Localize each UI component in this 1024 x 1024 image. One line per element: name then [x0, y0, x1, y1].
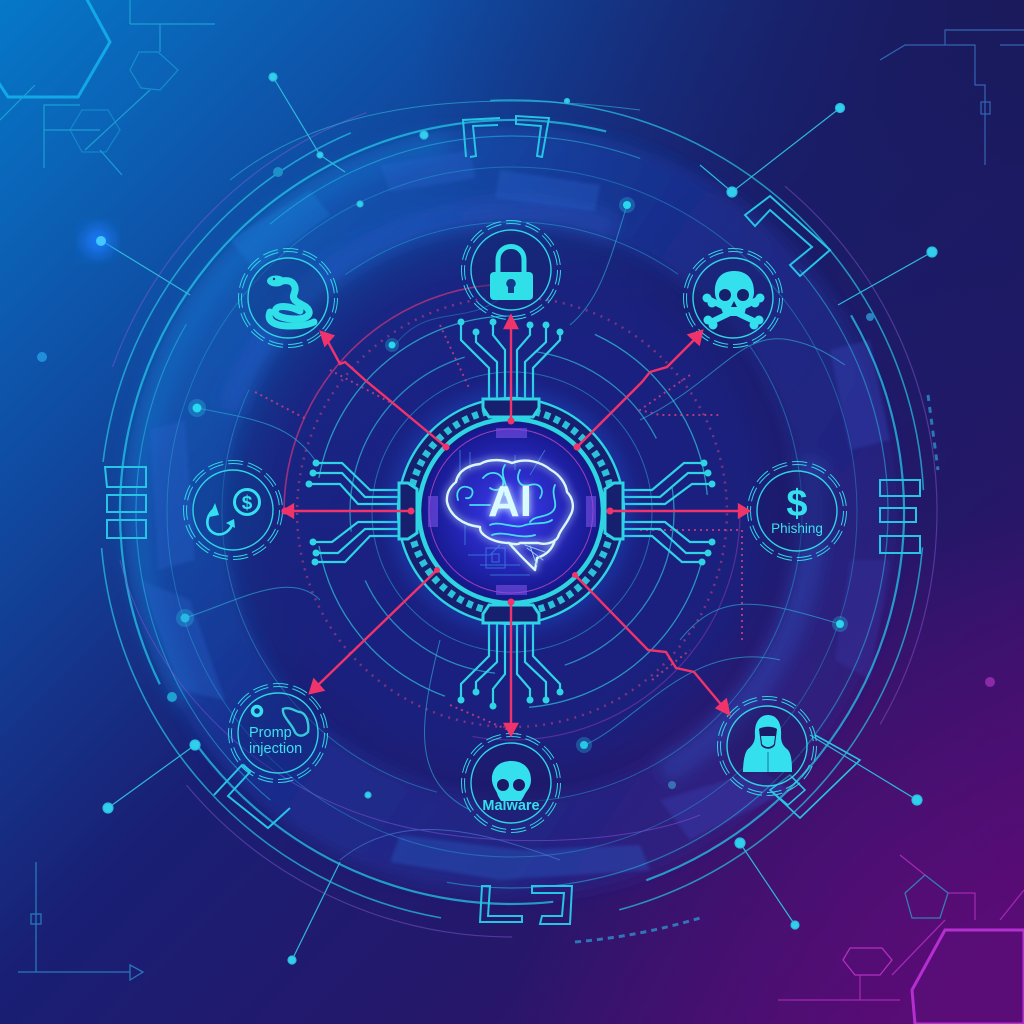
threat arrows	[282, 316, 749, 735]
threat icon: malware skull	[462, 734, 560, 832]
threat icon: hook and coin: $	[242, 493, 253, 514]
hub core	[422, 422, 600, 600]
corner decoration: top right	[880, 30, 1024, 165]
arrow: to snake	[321, 332, 446, 447]
threat icon: prompt injection: Promp	[249, 725, 292, 741]
hud bracket: right	[880, 480, 920, 553]
arrow: to prompt injection	[310, 570, 437, 693]
hud bracket: bottom	[480, 886, 572, 924]
threat icon: phishing dollar	[748, 462, 846, 560]
hud bracket: top	[463, 116, 549, 157]
AI label: AI	[488, 477, 532, 526]
inner dark disc	[217, 217, 807, 807]
arrow: to phishing	[610, 505, 749, 517]
arrow: to lock	[505, 316, 517, 421]
glowing nodes	[84, 197, 848, 753]
central hub	[389, 389, 633, 633]
arrow: to hook	[283, 505, 411, 517]
hud bracket: bottom right	[770, 735, 860, 818]
arrow: to malware	[505, 602, 517, 735]
threat icon: snake	[238, 248, 338, 348]
circuit traces: left	[306, 460, 402, 566]
inner concentric arcs	[218, 218, 806, 806]
threat icon: phishing dollar: $	[786, 483, 808, 525]
arrow: to hacker	[575, 575, 729, 714]
hud bracket: left	[105, 467, 146, 538]
flowing curves	[120, 101, 845, 860]
brain	[447, 460, 573, 570]
corner decoration: bottom left	[18, 862, 143, 980]
threat icon: hook and coin	[184, 460, 282, 560]
threat icon: skull and crossbones	[684, 248, 782, 348]
circuit traces: right	[622, 460, 716, 566]
hud bracket: bottom left	[214, 765, 290, 828]
hub connector tabs	[399, 399, 623, 623]
hud dashes right	[575, 395, 938, 942]
hub rings	[398, 398, 624, 624]
arrow: to crossbones	[577, 331, 702, 447]
threat icon: phishing dollar: Phishing	[771, 521, 823, 536]
threat icon: prompt injection: injection	[249, 741, 302, 757]
threat icon: hooded hacker	[718, 696, 816, 796]
arrow origin dots	[282, 418, 614, 606]
band blotches	[140, 150, 890, 880]
circuit traces: bottom	[458, 622, 564, 710]
hub purple blocks	[428, 428, 596, 595]
hud bracket: top right	[745, 196, 830, 276]
hub inner circuitry	[460, 450, 545, 575]
threat icon: prompt injection	[228, 684, 328, 782]
corner decoration: bottom right	[778, 855, 1024, 1024]
threat icon: malware skull: Malware	[482, 798, 540, 814]
threat icon: lock	[462, 220, 560, 320]
corner decoration: top left	[0, 0, 215, 175]
hub glow	[389, 389, 633, 633]
circuit traces: top	[458, 318, 564, 402]
magenta dotted markers	[255, 325, 742, 735]
